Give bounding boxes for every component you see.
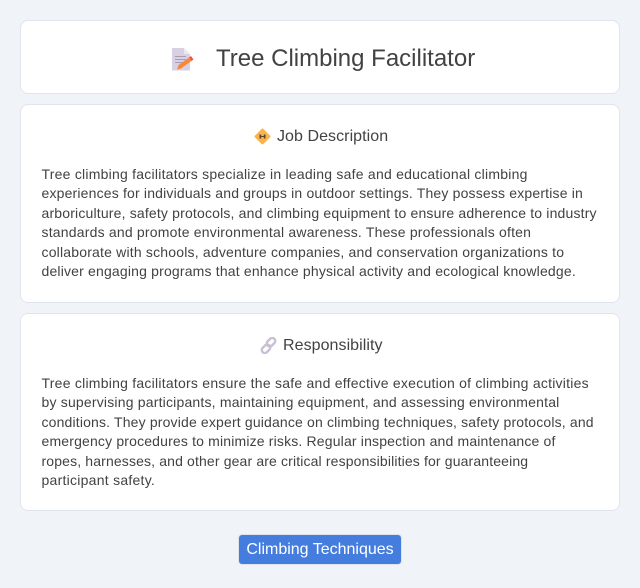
text block: responsibility: participant safety. — [42, 472, 155, 488]
text block: responsibility: conditions. They provide expert guidance on climbing techniques, safety protocols, and — [42, 414, 594, 430]
text block: responsibility: ropes, harnesses, and other gear are critical responsibilities for guaranteeing — [42, 453, 528, 469]
icon: chain link — [260, 337, 276, 354]
text block: responsibility: Tree climbing facilitators ensure the safe and effective execution of climbing activities — [42, 375, 589, 391]
icon: construction diamond sign — [254, 128, 270, 144]
text block: job description — [42, 166, 597, 279]
text block: job description: collaborate with schools, adventure companies, and conservation organizations to — [42, 244, 564, 260]
button: climbing techniques — [238, 534, 402, 565]
button: climbing techniques: Climbing Techniques — [246, 541, 394, 558]
text block: job description: experiences for individuals and groups in outdoor settings. They possess expertise in — [42, 185, 583, 201]
text block: responsibility — [42, 375, 594, 488]
text block: responsibility: by supervising participants, maintaining equipment, and assessing environmental — [42, 394, 559, 410]
panel: responsibility — [20, 313, 620, 511]
text block: job description: standards and promote environmental awareness. These professionals often — [42, 224, 531, 240]
text block: job description: deliver engaging programs that enhance physical activity and ecological knowledge. — [42, 263, 576, 279]
panel: title card — [20, 20, 620, 94]
heading: job description: Job Description — [277, 128, 388, 145]
title: Tree Climbing Facilitator — [216, 45, 475, 72]
heading: responsibility: Responsibility — [283, 337, 383, 354]
text block: job description: arboriculture, safety protocols, and climbing equipment to ensure adherence to industry — [42, 205, 597, 221]
icon: document with pencil — [172, 48, 194, 70]
panel: job description — [20, 104, 620, 303]
text block: job description: Tree climbing facilitators specialize in leading safe and educational climbing — [42, 166, 528, 182]
text block: responsibility: emergency procedures to minimize risks. Regular inspection and maintenance of — [42, 433, 556, 449]
